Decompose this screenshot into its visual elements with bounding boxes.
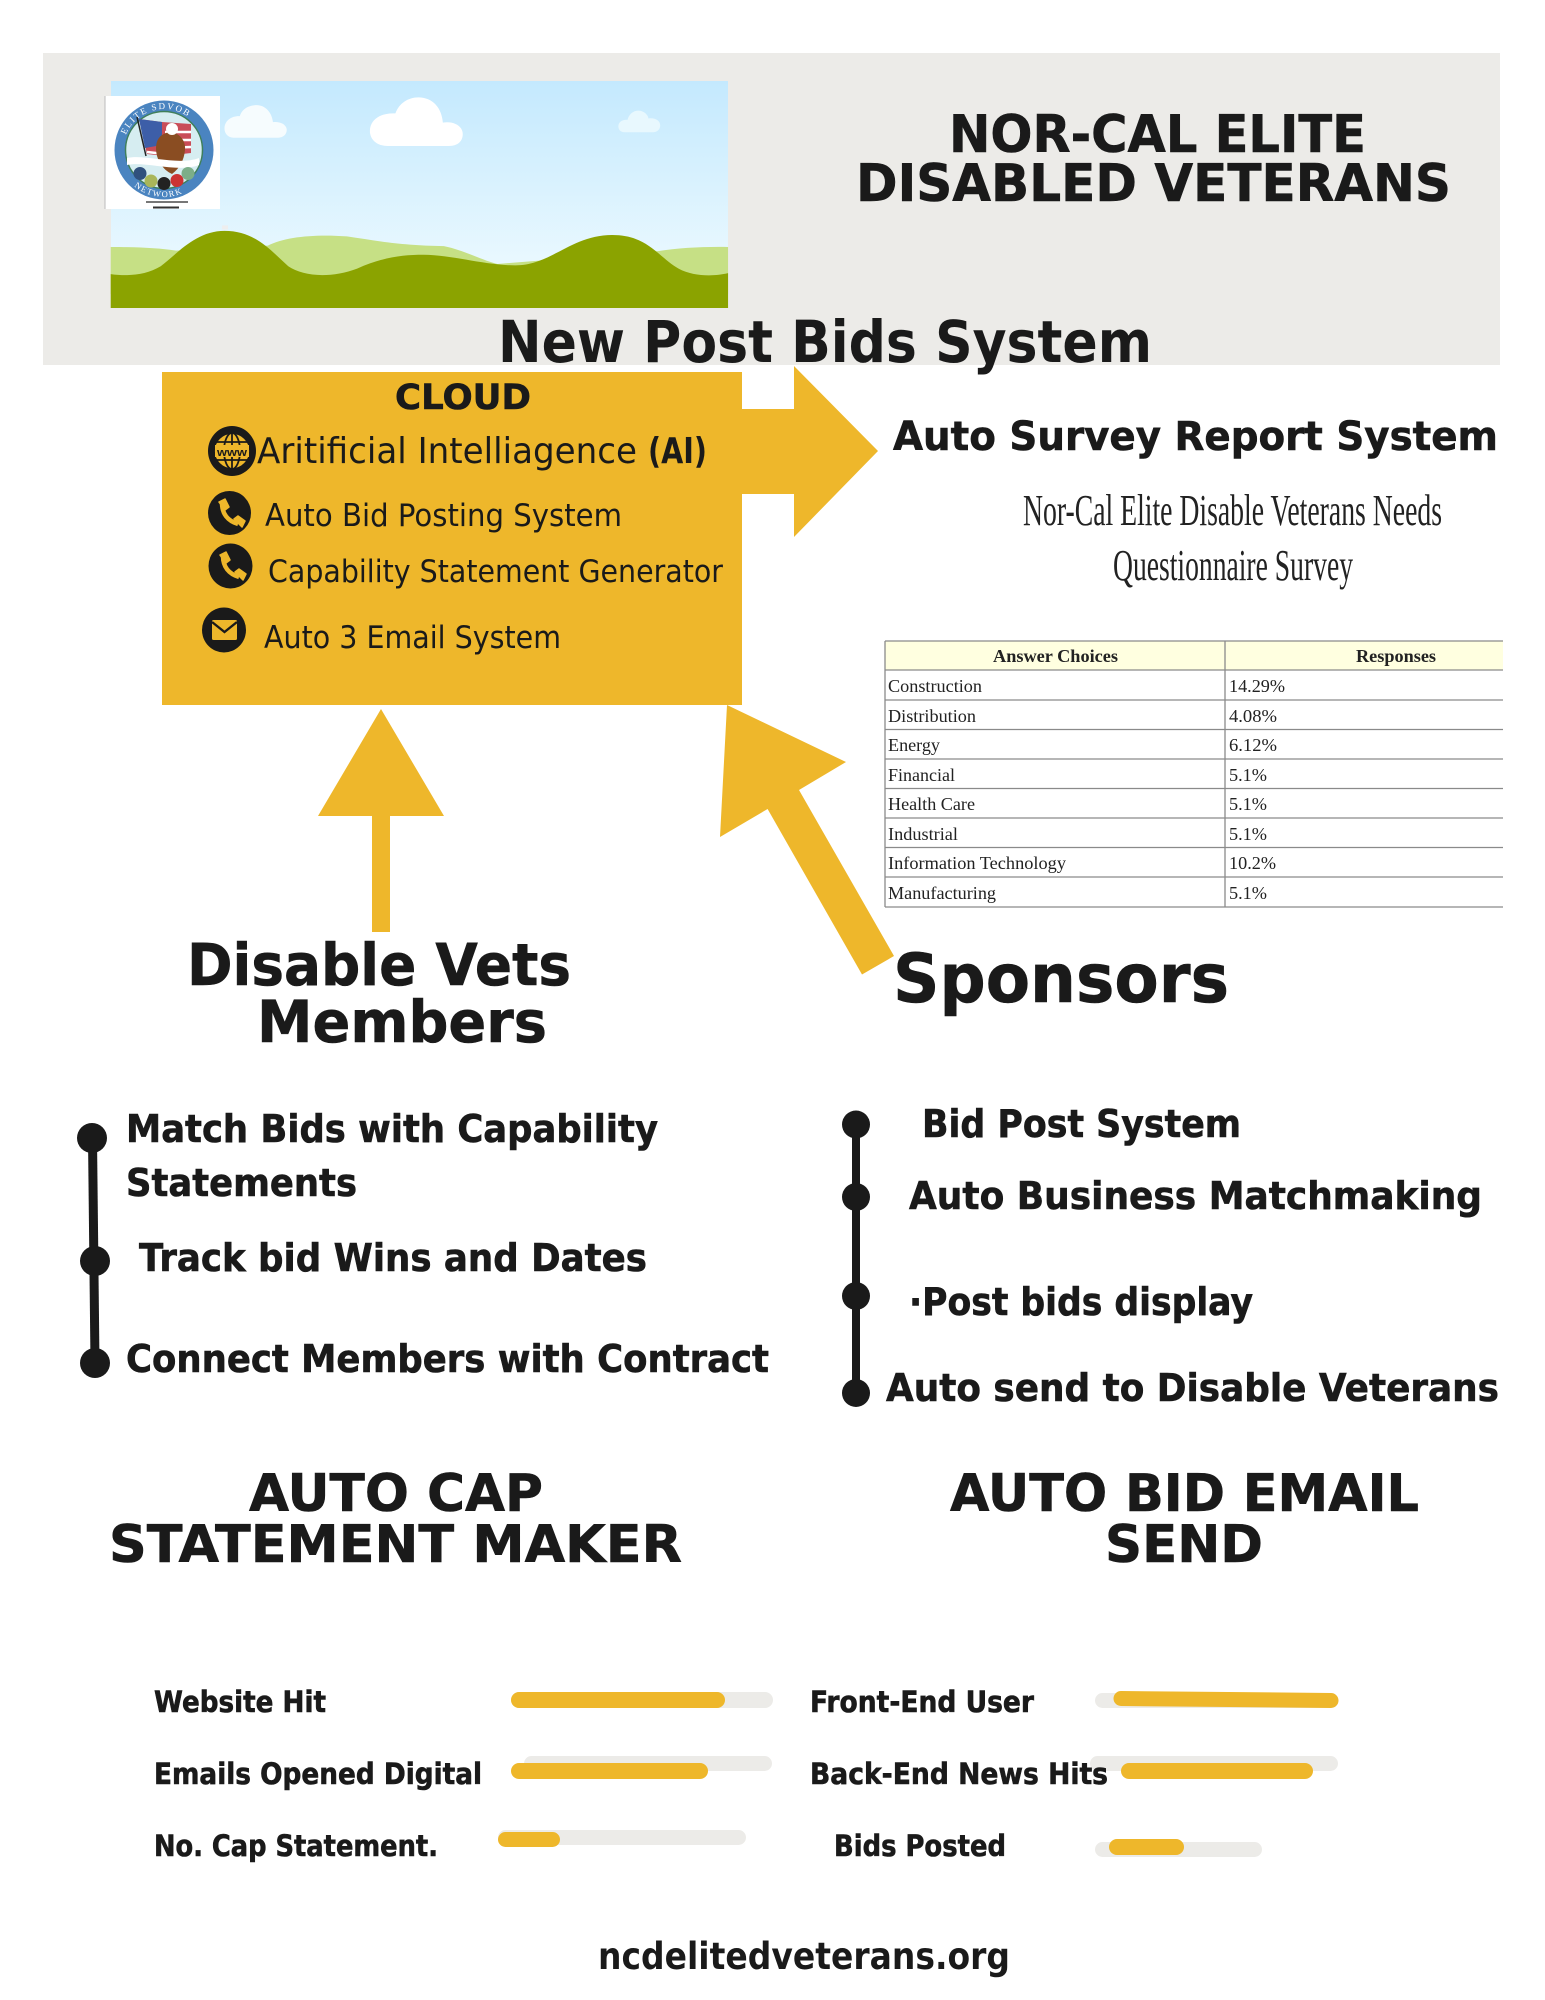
- bar: emails opened digital: [154, 1756, 772, 1791]
- bar: back-end news hits: Back-End News Hits: [810, 1757, 1108, 1791]
- bar: no. cap statement: [154, 1829, 746, 1863]
- text: AI: (AI): [648, 431, 707, 472]
- survey title: [1023, 486, 1442, 590]
- heading: disable vets members: [187, 931, 571, 1056]
- survey table: Answer Choices: [993, 646, 1118, 666]
- heading: auto bid email send: AUTO BID EMAIL: [950, 1464, 1419, 1524]
- list: members: Statements: [126, 1161, 357, 1205]
- logo badge: NETWORK: [134, 182, 182, 198]
- survey title: Questionnaire Survey: [1113, 541, 1353, 590]
- survey table: 6.12%: [1229, 735, 1277, 755]
- text: email system: Auto 3 Email System: [264, 620, 561, 656]
- bar: front-end user: [810, 1685, 1338, 1719]
- logo badge: ELITE SDVOB: [120, 103, 190, 135]
- heading: New Post Bids System: New Post Bids System: [498, 308, 1152, 376]
- arrow: cloud to survey: [742, 366, 878, 537]
- survey table: 4.08%: [1229, 706, 1277, 726]
- text: auto bid posting: Auto Bid Posting System: [265, 498, 622, 534]
- heading: disable vets members: Members: [257, 988, 547, 1056]
- survey table: 14.29%: [1229, 676, 1285, 696]
- icon: phone: [208, 544, 252, 588]
- heading: auto cap statement maker: STATEMENT MAKER: [109, 1515, 682, 1575]
- list: sponsors: ·Post bids display: [909, 1280, 1253, 1324]
- arrow: members to cloud: [318, 709, 444, 932]
- bar: front-end user: Front-End User: [810, 1685, 1035, 1719]
- arrow: sponsors to cloud: [720, 705, 894, 974]
- bar: website hit: [154, 1685, 773, 1719]
- logo badge: [104, 96, 220, 209]
- survey table: Energy: [888, 735, 940, 755]
- heading: auto cap statement maker: AUTO CAP: [249, 1464, 543, 1524]
- survey table: Financial: [888, 765, 955, 785]
- heading: auto cap statement maker: [109, 1464, 682, 1575]
- bar: website hit: Website Hit: [154, 1685, 326, 1719]
- title: organization name: NOR-CAL ELITE: [949, 105, 1366, 165]
- survey table: Health Care: [888, 794, 975, 814]
- survey table: 5.1%: [1229, 883, 1267, 903]
- title: organization name: [856, 105, 1451, 214]
- heading: auto bid email send: SEND: [1105, 1515, 1263, 1575]
- icon: phone: [208, 491, 251, 535]
- list: members: Match Bids with Capability: [126, 1107, 658, 1151]
- cloud heading: CLOUD: [395, 378, 531, 418]
- landscape illustration: [111, 81, 728, 308]
- heading: sponsors: Sponsors: [893, 940, 1229, 1019]
- bar: bids posted: [834, 1829, 1262, 1863]
- survey table: 5.1%: [1229, 794, 1267, 814]
- list: sponsors: Auto Business Matchmaking: [909, 1174, 1482, 1218]
- survey table: [885, 641, 1503, 907]
- survey table: Distribution: [888, 706, 976, 726]
- list: sponsors: [886, 1102, 1499, 1410]
- icon: globe: www: [216, 447, 248, 459]
- survey table: 5.1%: [1229, 765, 1267, 785]
- text: capability statement: Capability Statement Generator: [268, 554, 723, 590]
- survey table: Industrial: [888, 824, 958, 844]
- timeline: members: [77, 1123, 110, 1378]
- heading: disable vets members: Disable Vets: [187, 931, 571, 999]
- title: organization name: DISABLED VETERANS: [856, 154, 1451, 214]
- survey table: Responses: [1356, 646, 1436, 666]
- text: artificial intelligence: Aritificial Intelliagence: [257, 431, 637, 472]
- survey table: 5.1%: [1229, 824, 1267, 844]
- panel: header background: [43, 53, 1500, 365]
- survey table: 10.2%: [1229, 853, 1276, 873]
- icon: globe: [208, 426, 256, 476]
- timeline: sponsors: [842, 1110, 870, 1407]
- bar: back-end news hits: [810, 1756, 1338, 1791]
- survey table: Information Technology: [888, 853, 1066, 873]
- bar: bids posted: Bids Posted: [834, 1829, 1006, 1863]
- icon: email: [202, 608, 246, 652]
- list: sponsors: Bid Post System: [922, 1102, 1241, 1146]
- list: sponsors: Auto send to Disable Veterans: [886, 1366, 1499, 1410]
- bar: no. cap statement: No. Cap Statement.: [154, 1829, 438, 1863]
- panel: cloud: [162, 372, 742, 705]
- bar: emails opened digital: Emails Opened Digital: [154, 1757, 482, 1791]
- heading: auto bid email send: [950, 1464, 1419, 1575]
- survey table: Construction: [888, 676, 982, 696]
- survey table: Manufacturing: [888, 883, 996, 903]
- footer url: ncdelitedveterans.org: [598, 1935, 1010, 1978]
- list: members: [126, 1107, 769, 1381]
- list: members: Track bid Wins and Dates: [139, 1236, 647, 1280]
- heading: auto survey report: Auto Survey Report System: [893, 414, 1498, 460]
- list: members: Connect Members with Contract: [126, 1337, 769, 1381]
